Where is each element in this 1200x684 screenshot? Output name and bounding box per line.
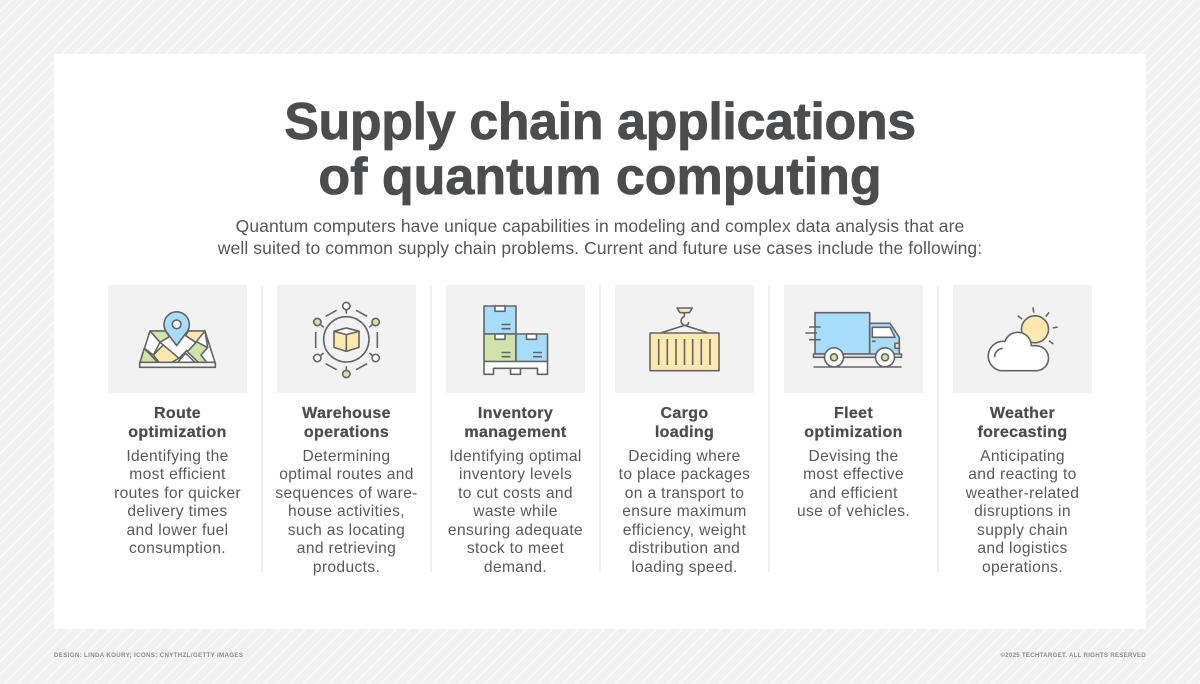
text: to cut costs and xyxy=(458,485,573,502)
icon: sun and cloud xyxy=(988,307,1058,371)
title xyxy=(284,93,916,206)
text: Warehouse xyxy=(302,405,391,422)
text: such as locating xyxy=(288,522,405,539)
text: ensure maximum xyxy=(622,503,747,520)
icon: warehouse network xyxy=(314,302,379,378)
text: disruptions in xyxy=(974,503,1071,520)
text: and reacting to xyxy=(968,466,1077,483)
text: routes for quicker xyxy=(114,485,241,502)
text: weather-related xyxy=(966,485,1079,502)
text: demand. xyxy=(484,559,547,576)
text: Devising the xyxy=(808,448,898,464)
text: Fleet xyxy=(834,405,873,422)
text: efficiency, weight xyxy=(623,522,746,539)
text: and logistics xyxy=(977,540,1068,557)
text: Deciding where xyxy=(628,448,741,464)
text: and efficient xyxy=(809,485,898,502)
text: optimization xyxy=(804,424,903,441)
text: use of vehicles. xyxy=(797,503,910,520)
column: fleet optimization xyxy=(797,405,910,520)
white card xyxy=(54,54,1146,629)
text: Determining xyxy=(303,448,390,464)
text: sequences of ware- xyxy=(275,485,418,502)
text: products. xyxy=(313,559,380,576)
text: optimization xyxy=(128,424,227,441)
text: delivery times xyxy=(127,503,228,520)
intro text: Quantum computers have unique capabilities in modeling and complex data analysis that are xyxy=(236,216,964,236)
text: to place packages xyxy=(619,466,750,483)
text: stock to meet xyxy=(467,540,564,557)
text: optimal routes and xyxy=(279,466,414,483)
intro text: well suited to common supply chain problems. Current and future use cases include the following: xyxy=(218,238,982,258)
text: Inventory xyxy=(478,405,553,422)
text: Anticipating xyxy=(980,448,1065,464)
footer credit: DESIGN: LINDA KOURY; ICONS: CNYTHZL/GETTY IMAGES xyxy=(54,652,243,658)
title: Supply chain applications xyxy=(284,93,916,151)
text: Route xyxy=(154,405,201,422)
text: loading speed. xyxy=(631,559,738,576)
text: and retrieving xyxy=(297,540,396,557)
text: most effective xyxy=(803,466,904,483)
text: distribution and xyxy=(629,540,740,557)
text: most efficient xyxy=(129,466,226,483)
text: consumption. xyxy=(129,540,226,557)
column: route optimization xyxy=(114,405,241,557)
text: and lower fuel xyxy=(126,522,228,539)
column: warehouse operations xyxy=(275,405,418,576)
intro text xyxy=(218,216,982,258)
text: Cargo xyxy=(660,405,708,422)
text: supply chain xyxy=(977,522,1068,539)
text: operations xyxy=(304,424,389,441)
text: management xyxy=(464,424,567,441)
text: inventory levels xyxy=(459,466,572,483)
column: cargo loading xyxy=(618,405,750,576)
icon: map with pin xyxy=(140,312,215,367)
text: waste while xyxy=(473,503,558,520)
text: operations. xyxy=(982,559,1063,576)
text: Weather xyxy=(990,405,1055,422)
text: on a transport to xyxy=(625,485,744,502)
icon: stacked boxes on pallet xyxy=(484,306,548,374)
text: forecasting xyxy=(977,424,1068,441)
text: loading xyxy=(655,424,714,441)
text: Identifying the xyxy=(126,448,229,464)
icon: cargo container on hook xyxy=(650,308,719,371)
footer copyright: ©2025 TECHTARGET. ALL RIGHTS RESERVED xyxy=(1000,652,1146,658)
icon: delivery truck xyxy=(805,313,902,367)
text: house activities, xyxy=(288,503,405,520)
title: of quantum computing xyxy=(318,148,882,206)
text: Identifying optimal xyxy=(449,448,582,464)
text: ensuring adequate xyxy=(448,522,583,539)
column: inventory management xyxy=(448,405,583,576)
column: weather forecasting xyxy=(966,405,1079,576)
